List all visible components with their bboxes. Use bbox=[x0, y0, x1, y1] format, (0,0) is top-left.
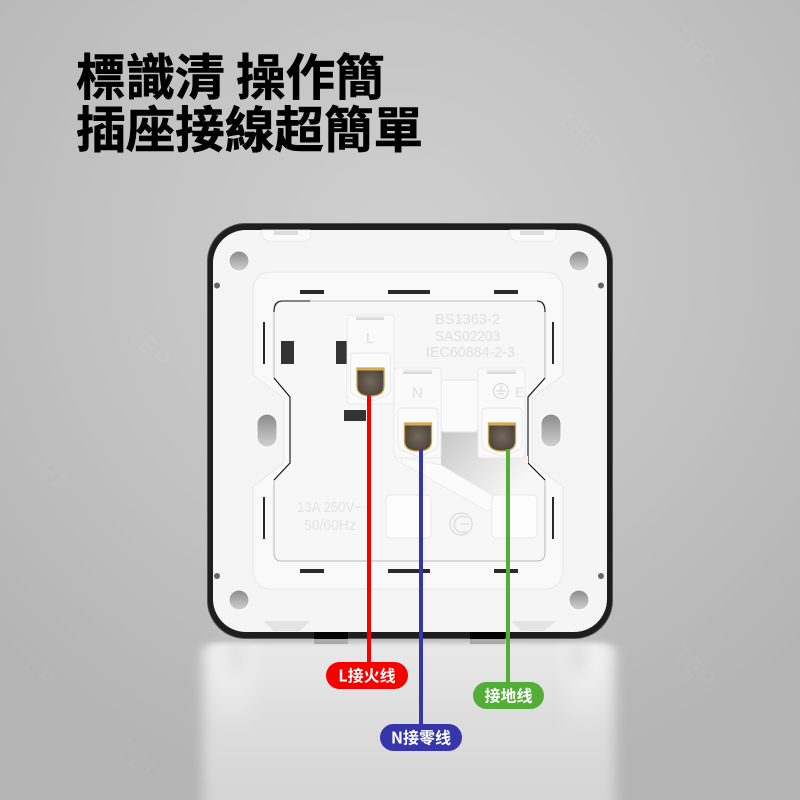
frame dark slits bbox=[263, 290, 554, 573]
live wire bbox=[367, 395, 371, 665]
socket back plate bbox=[208, 224, 612, 644]
plate shadow tabs bbox=[314, 638, 505, 644]
left push button bbox=[386, 495, 431, 538]
E terminal bbox=[478, 368, 525, 458]
embossed rating text: 50/60Hz bbox=[304, 517, 356, 534]
label: N neutral: N接零线 bbox=[391, 724, 451, 748]
N terminal: N bbox=[412, 385, 423, 402]
mounting slots bbox=[257, 414, 561, 447]
floor reflection bbox=[203, 643, 615, 800]
label: earth: 接地线 bbox=[484, 682, 533, 706]
right push button bbox=[492, 495, 537, 538]
label: L live bbox=[326, 662, 408, 689]
top and bottom clips bbox=[262, 230, 556, 631]
embossed standards text: SAS02203 bbox=[435, 328, 500, 345]
N terminal bbox=[394, 368, 441, 458]
watermarks: TEP bbox=[666, 18, 723, 75]
center block bbox=[441, 380, 478, 432]
watermarks: TEP bbox=[666, 638, 723, 695]
brand logo emboss bbox=[450, 513, 472, 535]
center recess bbox=[441, 430, 528, 496]
label: N neutral bbox=[380, 724, 462, 751]
live pin slots bbox=[281, 341, 366, 421]
neutral wire bbox=[419, 449, 423, 727]
label: earth bbox=[473, 682, 544, 709]
L terminal: L bbox=[366, 330, 374, 347]
earth wire bbox=[506, 449, 510, 685]
watermarks: TEP bbox=[551, 103, 608, 160]
plate black rim bbox=[208, 224, 612, 638]
L terminal bbox=[347, 315, 394, 404]
watermarks: TEP bbox=[21, 443, 78, 500]
embossed standards text: BS1363-2 bbox=[435, 311, 500, 328]
embossed standards text bbox=[426, 311, 515, 361]
E terminal: E bbox=[515, 384, 524, 400]
socket body with outline bbox=[274, 301, 545, 561]
title line 1: 標識清 操作簡 bbox=[76, 38, 385, 110]
screw holes bbox=[229, 251, 589, 610]
title line 2: 插座接線超簡單 bbox=[76, 90, 423, 162]
watermarks: TEP bbox=[6, 638, 63, 695]
watermarks: TEP bbox=[121, 318, 178, 375]
ground strap bbox=[402, 458, 492, 511]
embossed rating text: 13A 250V~ bbox=[297, 499, 362, 516]
embossed rating text bbox=[297, 499, 362, 534]
title bbox=[76, 38, 423, 162]
raised mounting frame bbox=[253, 272, 563, 589]
watermarks: TEP bbox=[111, 733, 168, 790]
label: L live: L接火线 bbox=[338, 662, 396, 686]
plate white face bbox=[213, 230, 607, 632]
embossed standards text: IEC60884-2-3 bbox=[426, 344, 515, 361]
